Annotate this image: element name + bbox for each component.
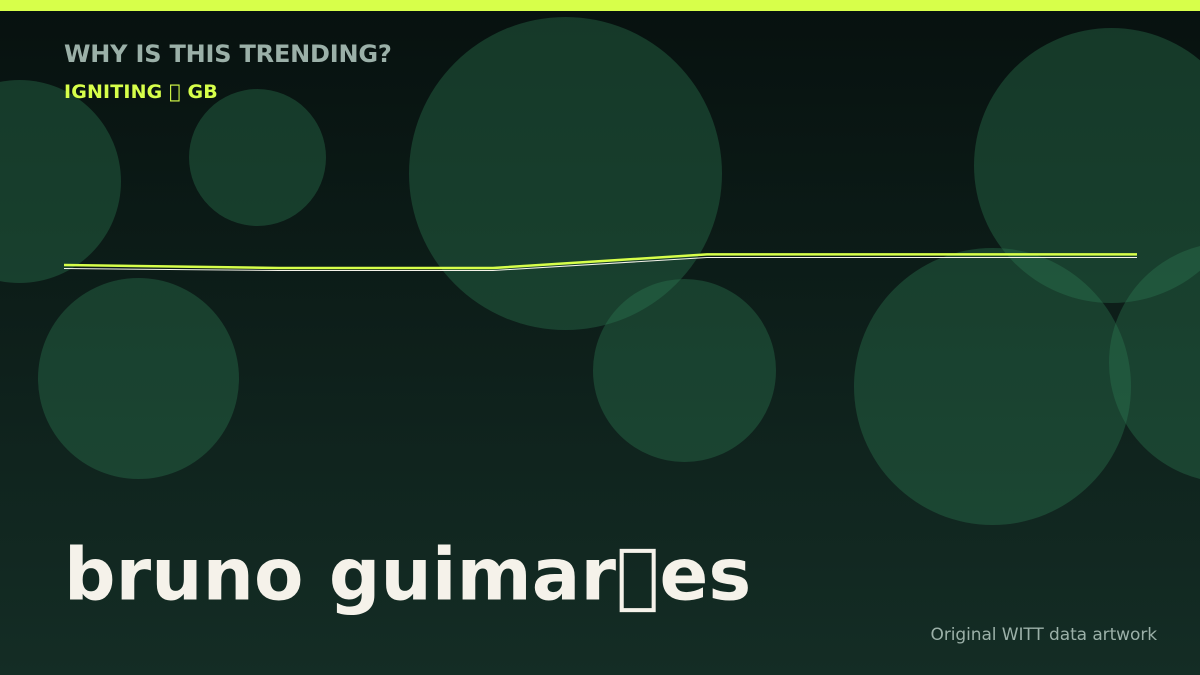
- top accent bar: [0, 0, 1200, 11]
- series line: lime: [64, 254, 1137, 268]
- decorative bubbles: [0, 17, 1200, 525]
- footer credit: Original WITT data artwork: [931, 625, 1157, 645]
- main title: bruno guimares: [64, 532, 751, 616]
- series line: white: [64, 258, 1137, 270]
- heading: why is this trending: WHY IS THIS TRENDING?: [64, 40, 392, 68]
- subheading: igniting GB: IGNITING  GB: [64, 81, 218, 103]
- trend line chart: [64, 254, 1137, 270]
